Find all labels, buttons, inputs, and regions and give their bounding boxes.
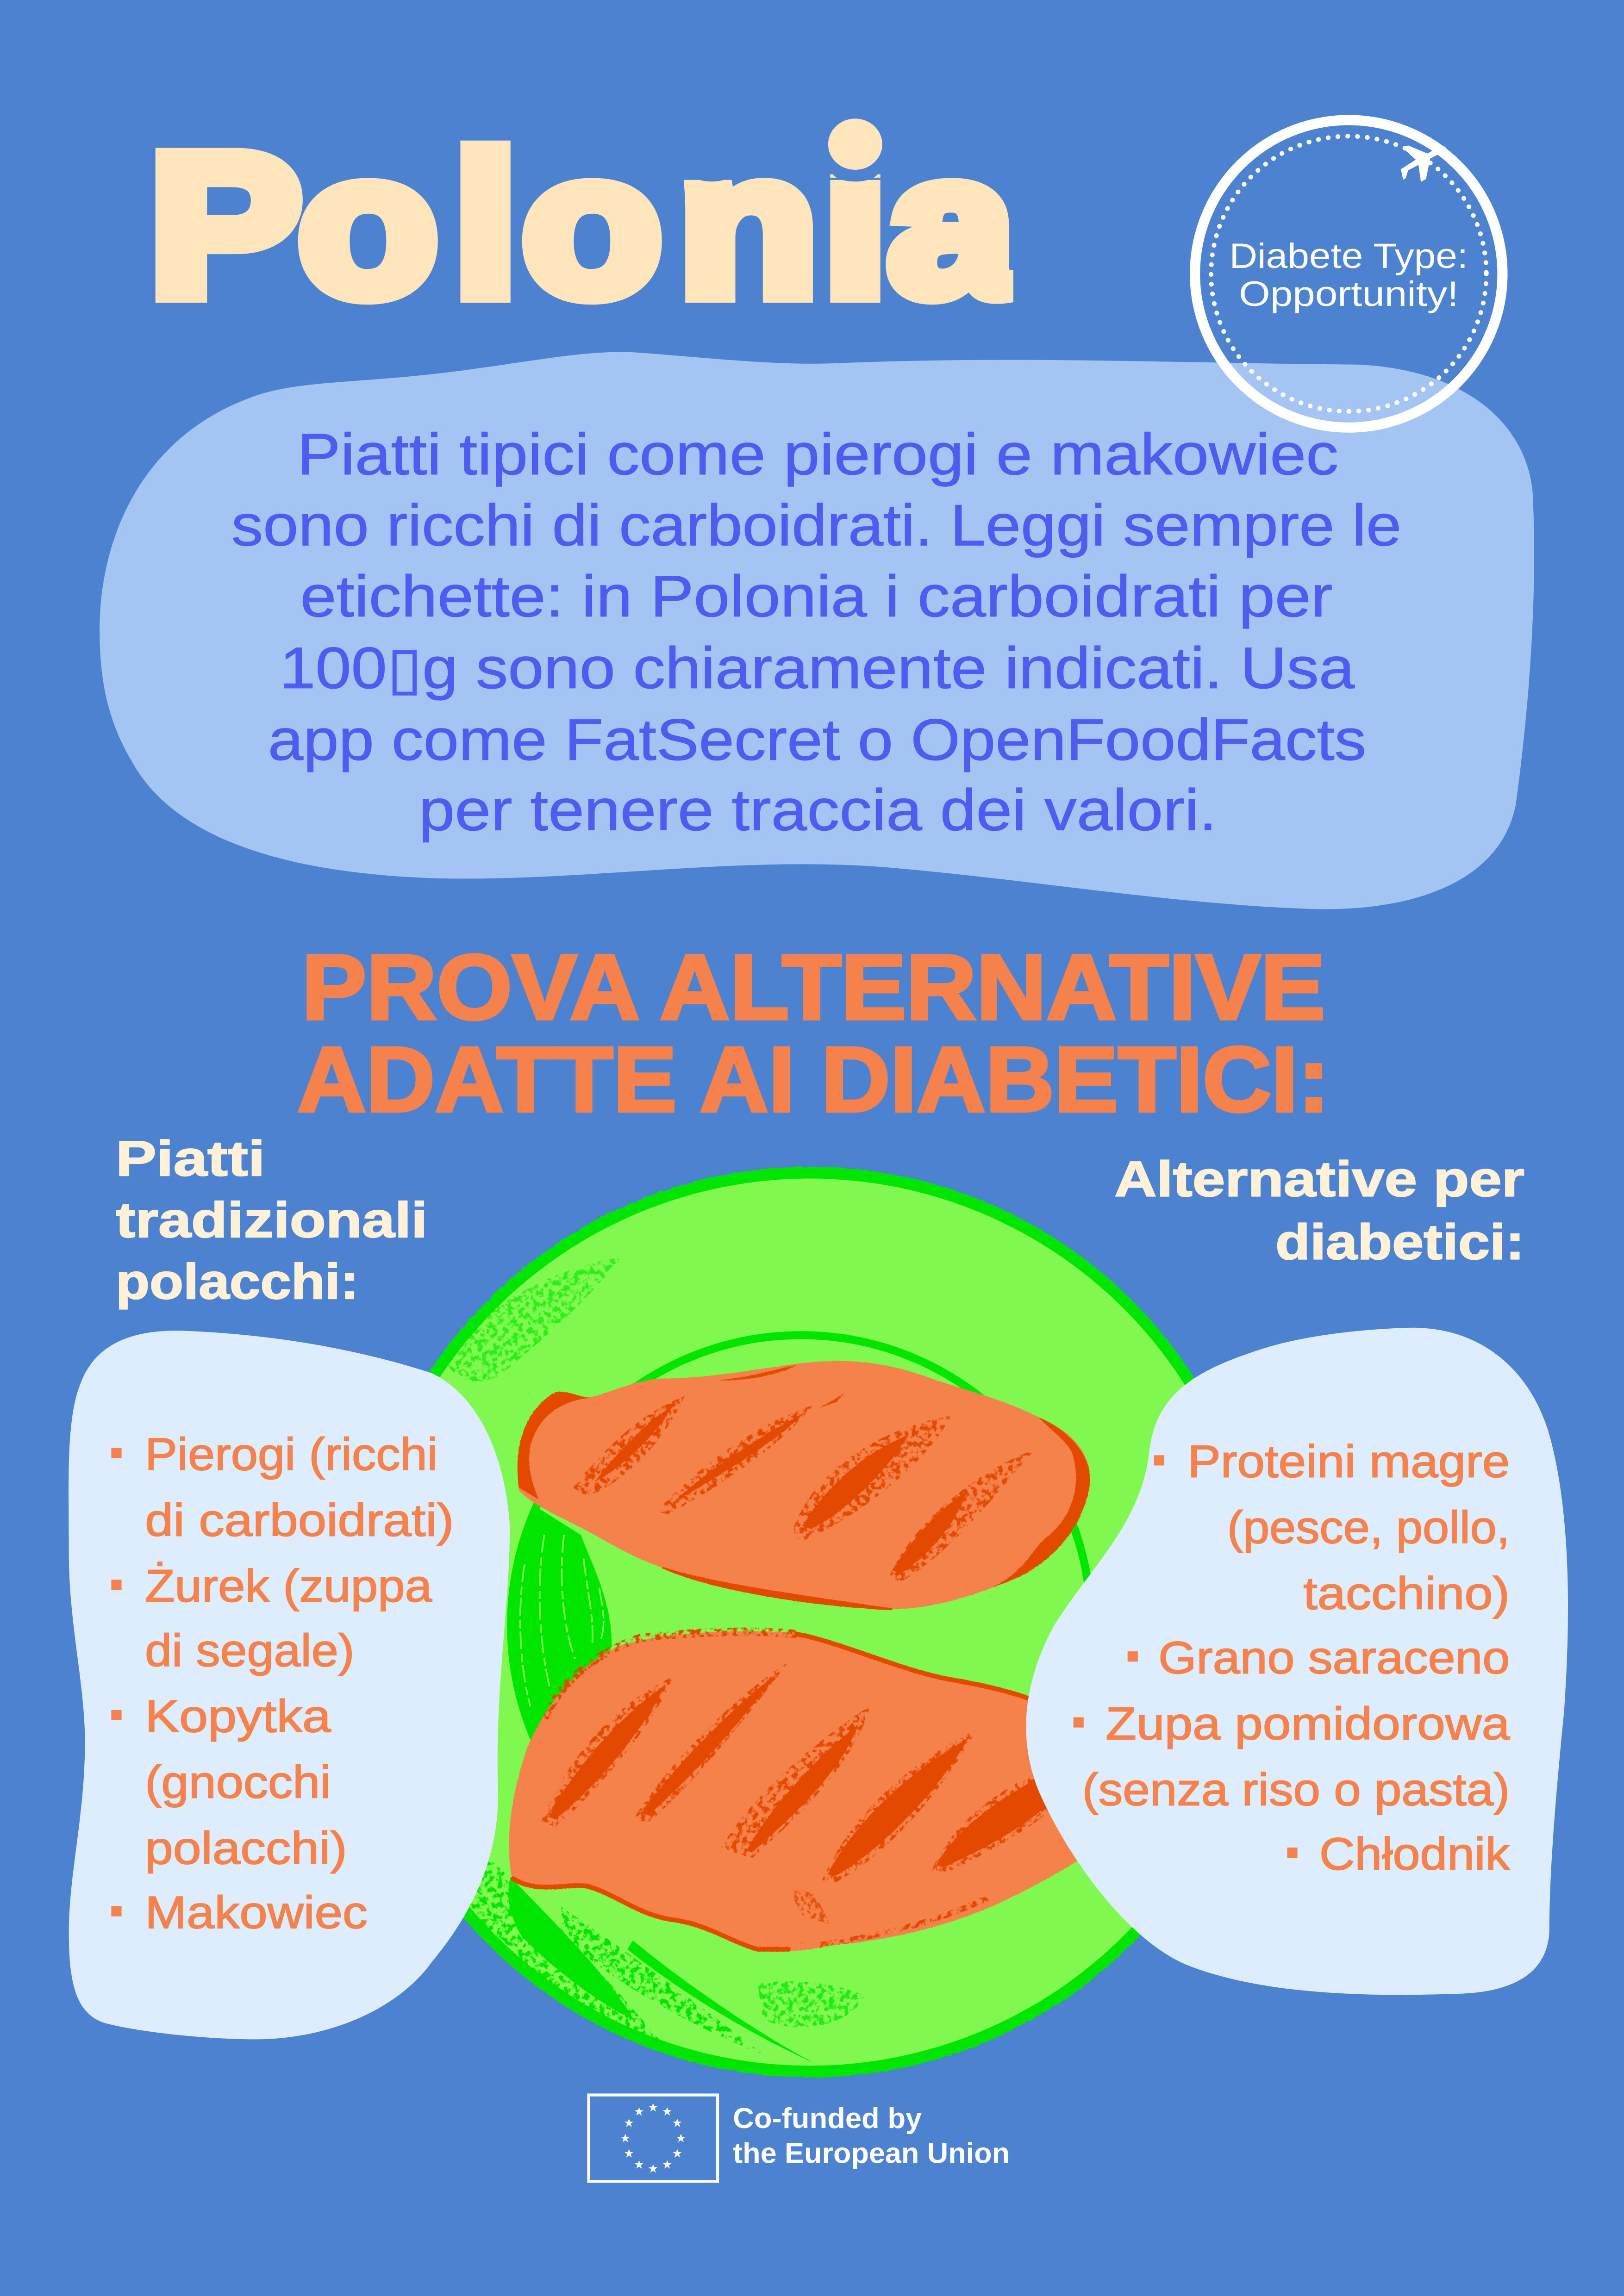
panel: traditional Polish dishes: di segale) bbox=[145, 1625, 354, 1676]
stamp badge: Opportunity! bbox=[1239, 274, 1459, 314]
panel: diabetic-friendly alternatives: tacchino) bbox=[1303, 1568, 1510, 1618]
panel: diabetic-friendly alternatives: Proteini magre bbox=[1187, 1436, 1510, 1487]
panel: intro text blob: app come FatSecret o OpenFoodFacts bbox=[268, 707, 1366, 772]
panel: intro text blob: Piatti tipici come pierogi e makowiec bbox=[297, 421, 1338, 487]
heading: PROVA ALTERNATIVE bbox=[302, 936, 1325, 1039]
panel: intro text blob: sono ricchi di carboidrati. Leggi sempre le bbox=[231, 492, 1401, 558]
panel: traditional Polish dishes bbox=[69, 1331, 510, 2039]
panel: traditional Polish dishes: (gnocchi bbox=[145, 1756, 331, 1807]
panel: diabetic-friendly alternatives: Zupa pomidorowa bbox=[1106, 1698, 1510, 1749]
panel: traditional Polish dishes: Pierogi (ricchi bbox=[145, 1429, 438, 1480]
illustration: plate with grilled chicken bbox=[354, 1167, 1265, 2078]
subheading: right column bbox=[1114, 1151, 1524, 1269]
panel: traditional Polish dishes: Kopytka bbox=[145, 1691, 331, 1742]
panel: traditional Polish dishes: Makowiec bbox=[145, 1887, 368, 1938]
panel: diabetic-friendly alternatives: Grano saraceno bbox=[1158, 1632, 1510, 1683]
panel: diabetic-friendly alternatives: Chłodnik bbox=[1319, 1828, 1510, 1879]
plate brush texture bbox=[443, 1257, 864, 2063]
chicken breast: bottom bbox=[509, 1631, 1111, 1952]
subheading: left column: Piatti bbox=[116, 1131, 265, 1186]
panel: diabetic-friendly alternatives: (pesce, pollo, bbox=[1227, 1502, 1510, 1553]
panel: intro text blob bbox=[100, 352, 1534, 909]
panel: intro text blob: etichette: in Polonia i carboidrati per bbox=[300, 563, 1333, 629]
icon: EU stars bbox=[621, 2103, 685, 2173]
heading bbox=[297, 936, 1330, 1131]
panel: diabetic-friendly alternatives: (senza riso o pasta) bbox=[1082, 1764, 1510, 1815]
panel: intro text blob: 100▯g sono chiaramente indicati. Usa bbox=[280, 635, 1355, 701]
plate bbox=[354, 1167, 1265, 2078]
stamp badge: Diabete Type: bbox=[1230, 236, 1468, 276]
panel: intro text blob: per tenere traccia dei valori. bbox=[419, 777, 1217, 843]
panel: diabetic-friendly alternatives bbox=[1026, 1328, 1568, 1995]
heading: ADATTE AI DIABETICI: bbox=[297, 1028, 1330, 1131]
subheading: right column: diabetici: bbox=[1275, 1214, 1524, 1269]
chicken breast: top bbox=[518, 1361, 1090, 1609]
EU co-funding logo: the European Union bbox=[733, 2138, 1010, 2170]
title: Polonia bbox=[150, 112, 1016, 337]
plate rim crescent bbox=[515, 1508, 612, 1742]
subheading: right column: Alternative per bbox=[1114, 1151, 1524, 1207]
panel: traditional Polish dishes: Żurek (zuppa bbox=[145, 1561, 432, 1612]
subheading: left column: polacchi: bbox=[116, 1254, 359, 1309]
panel: traditional Polish dishes: polacchi) bbox=[145, 1823, 347, 1873]
stamp badge bbox=[1195, 120, 1502, 428]
icon: airplane bbox=[1390, 131, 1455, 189]
EU co-funding logo: Co-funded by bbox=[733, 2103, 922, 2134]
panel: traditional Polish dishes: di carboidrati) bbox=[145, 1494, 454, 1545]
subheading: left column: tradizionali bbox=[116, 1192, 428, 1248]
EU co-funding logo bbox=[589, 2095, 1010, 2181]
subheading: left column bbox=[116, 1131, 428, 1309]
